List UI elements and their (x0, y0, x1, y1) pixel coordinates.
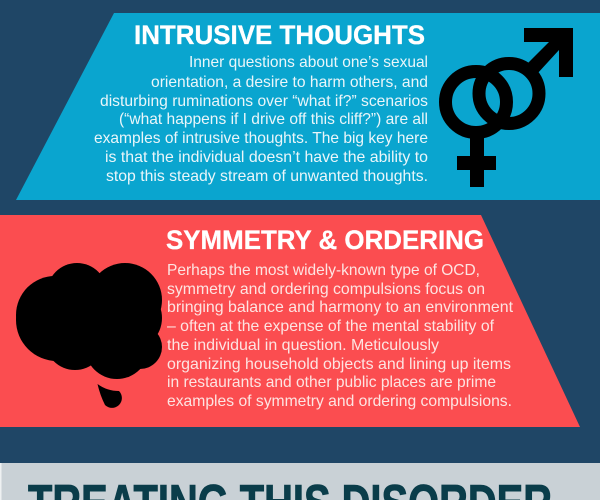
text block: intrusive thoughts description: is that the individual doesn’t have the ability to (105, 149, 428, 166)
icon: brain silhouette (16, 263, 162, 408)
text block: symmetry and ordering description: in restaurants and other public places are prime (167, 374, 496, 391)
panel: intrusive thoughts (16, 13, 600, 200)
panel: treating this disorder (0, 463, 600, 500)
heading: symmetry and ordering: SYMMETRY & ORDERING (166, 225, 484, 255)
text block: symmetry and ordering description: the individual in question. Meticulously (167, 337, 439, 354)
text block: symmetry and ordering description: organizing household objects and lining up items (167, 356, 511, 373)
text block: intrusive thoughts description: Inner questions about one’s sexual (189, 54, 428, 71)
text block: intrusive thoughts description: orientation, a desire to harm others, and (151, 74, 428, 91)
text block: intrusive thoughts description (94, 54, 428, 185)
text block: intrusive thoughts description: stop this steady stream of unwanted thoughts. (106, 168, 428, 185)
text block: symmetry and ordering description (167, 262, 514, 410)
text block: intrusive thoughts description: (“what happens if I drive off this cliff?”) are all (119, 111, 428, 128)
heading: intrusive thoughts: INTRUSIVE THOUGHTS (134, 20, 425, 50)
text block: symmetry and ordering description: bringing balance and harmony to an environment (167, 299, 514, 316)
text block: intrusive thoughts description: disturbing ruminations over “what if?” scenarios (100, 93, 428, 110)
panel: symmetry and ordering (0, 215, 580, 427)
text block: intrusive thoughts description: examples of intrusive thoughts. The big key here (94, 130, 428, 147)
text block: symmetry and ordering description: Perhaps the most widely-known type of OCD, (167, 262, 480, 279)
text block: symmetry and ordering description: symmetry and ordering compulsions focus on (167, 281, 485, 298)
icon: male and female symbols (446, 28, 573, 187)
text block: symmetry and ordering description: examples of symmetry and ordering compulsions. (167, 393, 512, 410)
text block: symmetry and ordering description: – often at the expense of the mental stability of (167, 318, 495, 335)
